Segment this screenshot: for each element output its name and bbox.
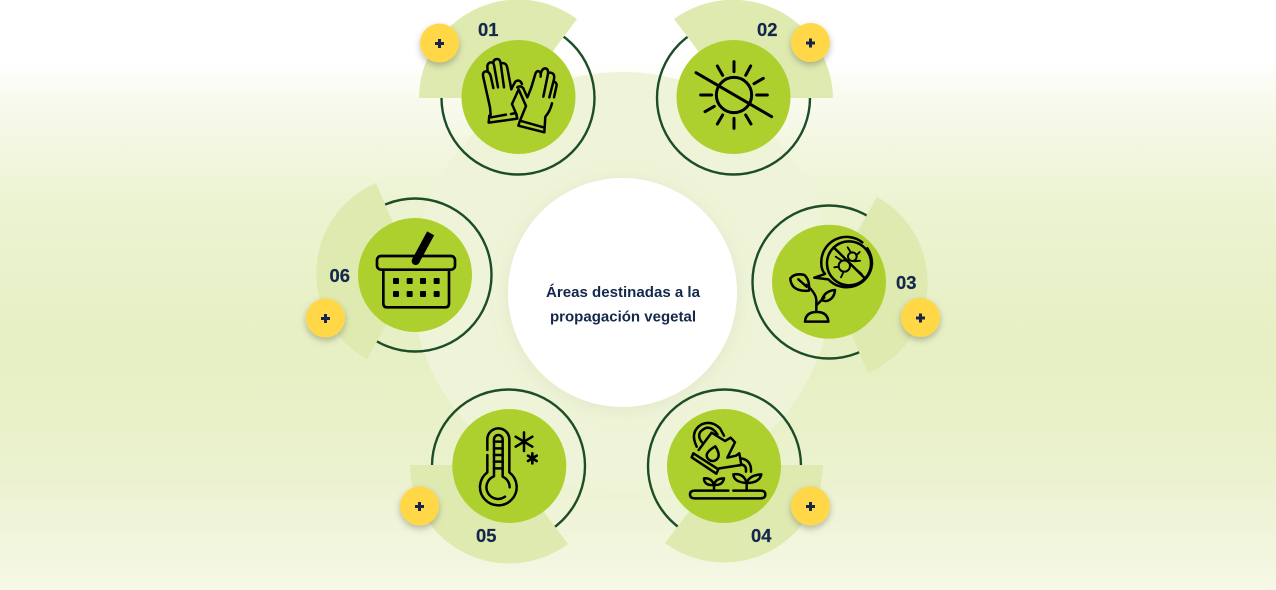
icon: thermometer and snow	[480, 428, 537, 505]
item 02: no sun	[657, 0, 833, 174]
item 05: thermometer	[400, 390, 585, 564]
button: plus 04	[791, 486, 830, 526]
item 05: thermometer: 05	[476, 525, 496, 546]
icon: watering can and seedlings	[690, 423, 765, 498]
item 06: basket: 06	[330, 265, 350, 286]
item 06: basket	[306, 183, 492, 359]
large pale background circle	[412, 72, 832, 492]
central circle with title	[508, 178, 737, 407]
icon: crossed-out sun	[696, 62, 772, 128]
button: plus 05	[400, 486, 439, 526]
button: plus 01	[420, 24, 459, 62]
button: plus 06	[306, 298, 345, 338]
item 01: gloves	[419, 0, 594, 174]
central circle with title: Áreas destinadas a la	[546, 284, 701, 301]
item 02: no sun: 02	[757, 19, 778, 40]
item 04: watering can: 04	[751, 525, 772, 546]
icon: plant with crossed-out bug	[790, 237, 872, 322]
item 04: watering can	[648, 390, 830, 563]
central circle with title: propagación vegetal	[550, 308, 696, 326]
button: plus 03	[901, 298, 940, 337]
icon: basket	[377, 233, 455, 307]
button: plus 02	[791, 23, 830, 62]
item 03: plant and pest	[752, 197, 940, 373]
icon: gloves	[483, 59, 557, 132]
item 03: plant and pest: 03	[896, 272, 916, 293]
item 01: gloves: 01	[478, 19, 498, 40]
